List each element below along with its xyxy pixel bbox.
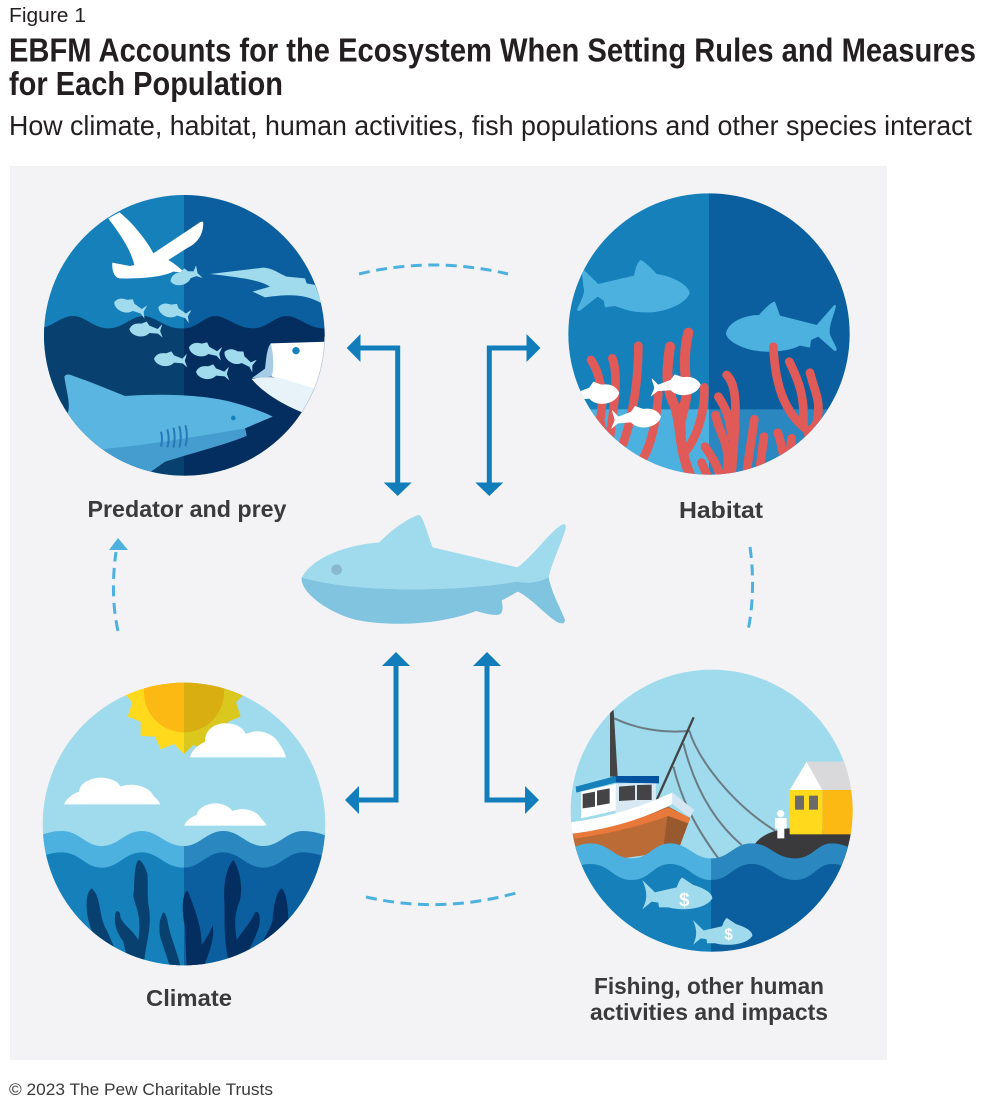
panel: diagram background: [10, 166, 887, 1060]
figure label: Figure 1: [9, 4, 86, 27]
shark: [50, 374, 273, 473]
arrow: habitat to fish: [475, 334, 540, 496]
net lines: [614, 718, 775, 858]
kelp: [87, 860, 288, 968]
fish with dollar: $: [679, 889, 690, 910]
fish with dollar: [693, 918, 752, 945]
clouds: [64, 723, 286, 826]
dashed arc: top: [359, 265, 508, 274]
dashed arc: right: [748, 547, 753, 631]
seagull: [108, 212, 203, 278]
label: fishing, other human activities and impacts: Fishing, other human: [594, 973, 824, 999]
arrow: climate to fish: [345, 652, 410, 814]
subtitle: How climate, habitat, human activities, fish populations and other species interact: [9, 110, 972, 141]
arrow: predator and prey to fish: [347, 334, 412, 496]
label: fishing, other human activities and impacts: activities and impacts: [590, 999, 828, 1025]
footer credit: © 2023 The Pew Charitable Trusts: [9, 1080, 273, 1099]
label: predator and prey: Predator and prey: [88, 496, 287, 522]
dashed arrow: climate to predator and prey: [109, 538, 128, 631]
shore: [755, 828, 851, 866]
boat: [568, 710, 694, 867]
label: habitat: Habitat: [679, 497, 763, 523]
arrow: fishing to fish: [473, 652, 539, 814]
circle: habitat: [568, 193, 850, 475]
fish with dollar: [642, 878, 712, 910]
dashed arc: bottom: [366, 893, 516, 905]
fish school: [112, 264, 258, 380]
title: for Each Population: [9, 65, 283, 102]
circle: fishing and human activities: [570, 670, 853, 952]
waves: [43, 831, 325, 966]
fish right: [726, 302, 837, 352]
waves: [576, 843, 848, 952]
sun: [126, 682, 243, 754]
circle: climate: [42, 682, 326, 966]
person: [775, 810, 787, 838]
circle: predator and prey: [44, 195, 325, 476]
label: climate: Climate: [146, 985, 232, 1011]
house: [790, 762, 856, 834]
fish left: [577, 260, 690, 312]
coral: [591, 333, 818, 477]
central fish: [302, 515, 566, 624]
seabird light: [210, 268, 322, 303]
fish with dollar: $: [724, 926, 733, 943]
large predator fish: [252, 342, 327, 413]
white fish: [569, 374, 701, 429]
